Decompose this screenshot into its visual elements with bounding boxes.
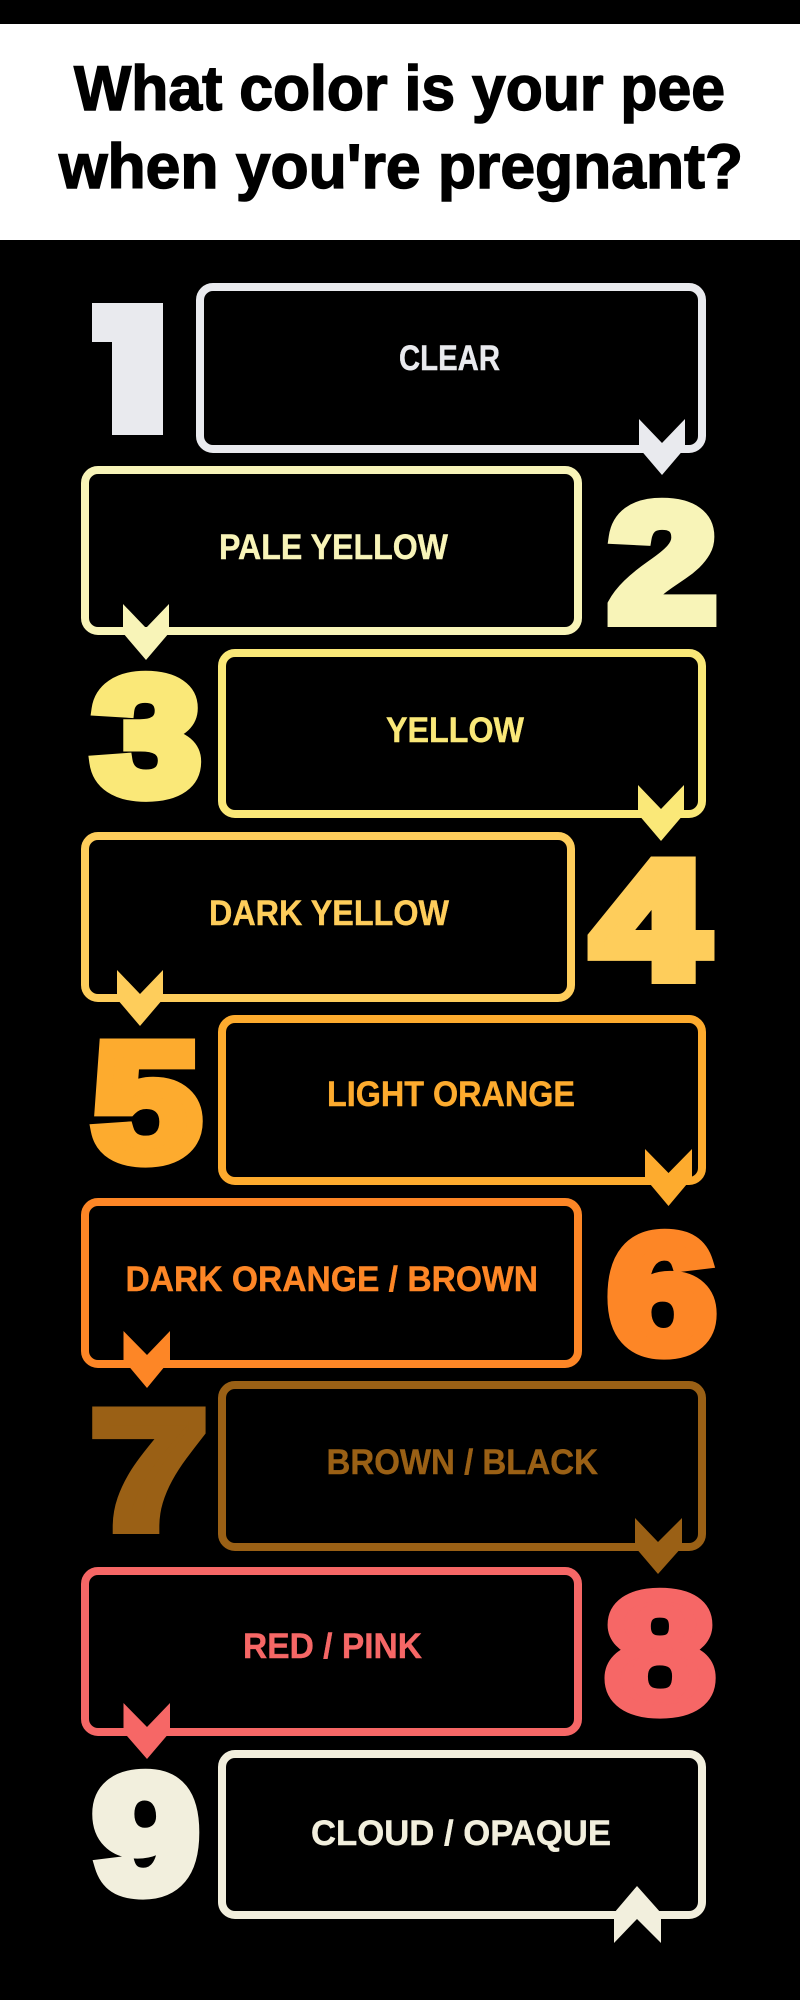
step 8: red / pink: 8 — [607, 1561, 713, 1745]
step 3: yellow: YELLOW — [386, 710, 524, 750]
step 2: pale yellow: 2 — [609, 471, 716, 655]
step 1: clear: 1 — [48, 279, 186, 463]
step 2: pale yellow: PALE YELLOW — [219, 527, 448, 567]
step 6: dark orange / brown — [85, 1202, 715, 1388]
step 9: cloud / opaque — [94, 1743, 702, 1943]
title: What color is your pee — [74, 54, 725, 124]
step 1: clear: CLEAR — [399, 338, 500, 378]
step 7: brown / black: BROWN / BLACK — [326, 1442, 598, 1482]
step 5: light orange: 5 — [93, 1010, 200, 1194]
step 3: yellow — [93, 644, 702, 841]
step 6: dark orange / brown: DARK ORANGE / BROWN — [126, 1259, 538, 1299]
step 9: cloud / opaque: 9 — [94, 1743, 198, 1926]
step 4: dark yellow: 4 — [593, 829, 707, 1013]
step 6: dark orange / brown: 6 — [609, 1202, 715, 1386]
step 5: light orange: LIGHT ORANGE — [327, 1074, 575, 1114]
step 8: red / pink — [85, 1561, 713, 1759]
step 8: red / pink: RED / PINK — [243, 1626, 422, 1666]
step 1: clear — [48, 279, 702, 475]
step 4: dark yellow — [85, 829, 707, 1026]
step 3: yellow: 3 — [93, 644, 200, 828]
step 7: brown / black: 7 — [92, 1379, 206, 1563]
title — [58, 54, 743, 202]
step 2: pale yellow — [85, 470, 716, 660]
step 7: brown / black — [92, 1379, 702, 1574]
step 5: light orange — [93, 1010, 702, 1206]
step 4: dark yellow: DARK YELLOW — [209, 893, 449, 933]
title banner — [0, 24, 800, 240]
step 9: cloud / opaque: CLOUD / OPAQUE — [311, 1813, 611, 1853]
title: when you're pregnant? — [58, 132, 743, 202]
